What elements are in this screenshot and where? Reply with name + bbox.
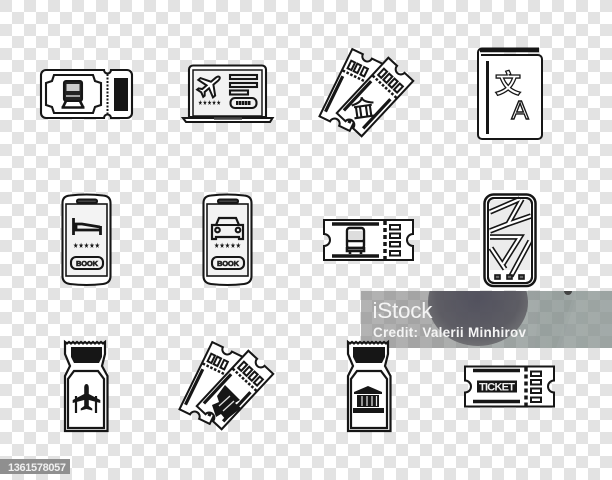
icon: phone car booking: BOOK — [217, 259, 240, 268]
icon: tall ticket with museum — [348, 342, 390, 431]
icon: phone hotel booking — [62, 194, 110, 285]
icon: phone car booking: ★★★★★ — [214, 241, 241, 250]
icon: phone car booking — [204, 194, 252, 285]
icon: laptop flight booking: ★★★★★ — [198, 99, 221, 107]
dark building — [212, 385, 241, 420]
front ticket — [337, 58, 413, 136]
icon: pair of tickets with building — [180, 342, 273, 429]
watermark banner — [361, 291, 612, 348]
front ticket — [197, 351, 273, 429]
pagoda — [351, 96, 375, 118]
back ticket — [180, 342, 242, 424]
icon: phone hotel booking: BOOK — [76, 259, 99, 268]
icon: TICKET ticket — [465, 366, 554, 406]
icon: pair of tickets with pagoda — [320, 49, 413, 136]
icon: tall ticket with airplane — [65, 342, 108, 431]
image id label: 1361578057 — [8, 462, 66, 474]
icon: train ticket — [41, 70, 132, 118]
icon: phone hotel booking: ★★★★★ — [73, 241, 100, 250]
back ticket — [320, 49, 382, 131]
translation glyphs: 文 — [495, 69, 521, 99]
icon: translation book: A — [511, 95, 529, 125]
icon: laptop flight booking — [183, 66, 272, 122]
image id label — [0, 459, 70, 474]
icon: bus ticket — [324, 220, 413, 260]
icon: phone with map — [480, 190, 540, 290]
watermark text: iStock: iStock — [372, 298, 433, 323]
icon: TICKET ticket: TICKET — [479, 382, 515, 394]
watermark text: credit: Credit: Valerii Minhirov — [373, 325, 526, 340]
icon: translation book — [478, 48, 542, 139]
